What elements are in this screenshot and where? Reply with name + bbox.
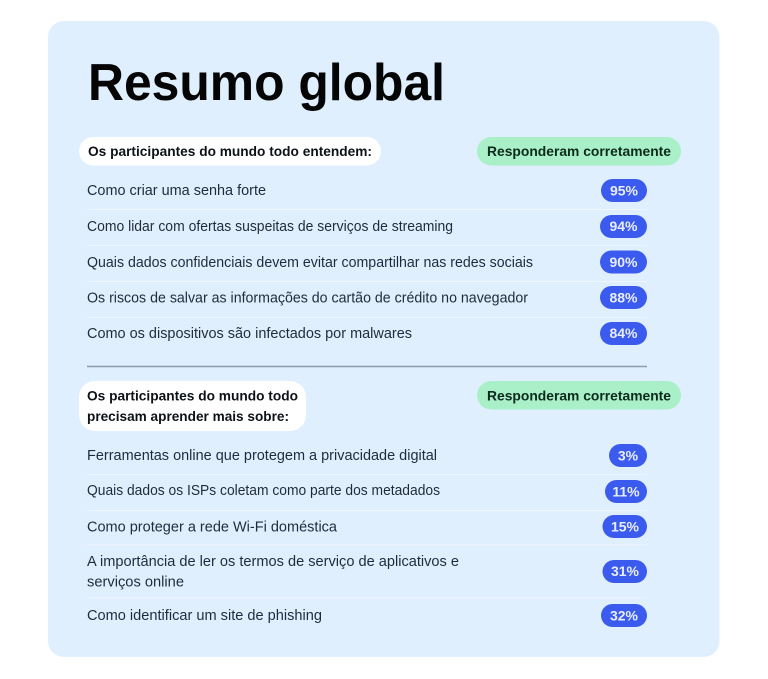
row: malware 84%: Como os dispositivos são infectados por malwares [87, 326, 412, 342]
row: saved card data 88% [87, 286, 647, 309]
row: home Wi-Fi 15%: Como proteger a rede Wi-Fi doméstica [87, 520, 338, 536]
row: privacy tools 3%: Ferramentas online que protegem a privacidade digital [87, 448, 437, 464]
row: streaming offers 94%: Como lidar com ofertas suspeitas de serviços de streaming [87, 219, 453, 235]
row: social networks 90% [87, 250, 647, 274]
row: terms of service 31% [87, 554, 647, 590]
row: social networks 90%: 90% [609, 254, 638, 270]
row: ISP metadata 11%: 11% [612, 484, 640, 500]
row: terms of service 31%: serviços online [87, 574, 184, 590]
column label: answered correctly: Responderam corretamente [487, 143, 671, 159]
row: ISP metadata 11%: Quais dados os ISPs coletam como parte dos metadados [87, 483, 440, 499]
row: streaming offers 94%: 94% [609, 218, 638, 234]
row: home Wi-Fi 15% [87, 515, 647, 538]
row: home Wi-Fi 15%: 15% [611, 518, 640, 534]
heading pill: need to learn: precisam aprender mais sobre: [87, 408, 289, 424]
row: privacy tools 3% [87, 444, 647, 467]
row: strong password 95% [87, 179, 647, 202]
row: malware 84% [87, 322, 647, 345]
row: privacy tools 3%: 3% [618, 448, 639, 464]
heading pill: need to learn [79, 381, 306, 431]
row: social networks 90%: Quais dados confidenciais devem evitar compartilhar nas redes sociais [87, 255, 533, 271]
row: strong password 95%: 95% [610, 182, 639, 198]
heading pill: understand: Os participantes do mundo todo entendem: [88, 143, 372, 159]
row: terms of service 31%: 31% [611, 563, 640, 579]
row: saved card data 88%: 88% [609, 290, 638, 306]
row: ISP metadata 11% [87, 480, 647, 503]
row: strong password 95%: Como criar uma senha forte [87, 183, 266, 199]
row: terms of service 31%: A importância de ler os termos de serviço de aplicativos e [87, 554, 459, 570]
heading pill: understand [79, 137, 381, 166]
title: Resumo global [88, 54, 445, 112]
column label: answered correctly [477, 381, 681, 410]
row: phishing 32%: 32% [610, 608, 639, 624]
row: malware 84%: 84% [609, 325, 638, 341]
heading pill: need to learn: Os participantes do mundo todo [87, 388, 298, 404]
column label: answered correctly [477, 137, 681, 166]
row: phishing 32% [87, 604, 647, 627]
section: participants need to learn [79, 381, 681, 627]
section: participants understand [79, 137, 681, 345]
row: streaming offers 94% [87, 215, 647, 238]
row: saved card data 88%: Os riscos de salvar as informações do cartão de crédito no navegador [87, 290, 528, 306]
row: phishing 32%: Como identificar um site de phishing [87, 608, 322, 624]
column label: answered correctly: Responderam corretamente [487, 388, 671, 404]
